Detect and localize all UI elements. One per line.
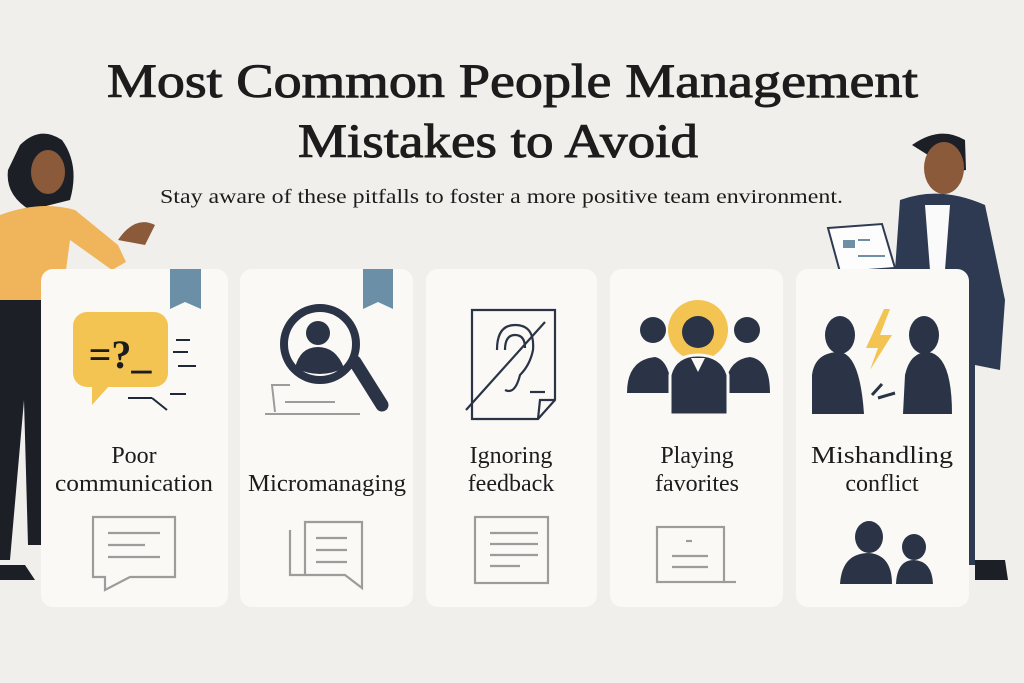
card 5: mishandling conflict [796,269,969,607]
card 2: micromanaging [240,269,413,607]
card 3: ignoring feedback: Ignoring [470,443,552,469]
icon: group with highlighted person [627,300,770,415]
figure: man [828,134,1008,580]
icon: chat [93,517,175,590]
card 4: playing favorites: favorites [655,471,739,497]
card 2: micromanaging: Micromanaging [248,471,406,497]
title: Mistakes to Avoid [298,115,698,168]
icon: two people with lightning [812,309,952,414]
subtitle: Stay aware of these pitfalls to foster a more positive team environment. [160,186,843,208]
card 1: poor communication: communication [55,471,213,497]
bookmark [170,269,201,309]
icon: crossed ear [466,310,555,419]
card 3: ignoring feedback [426,269,597,607]
card 1: poor communication [41,269,228,607]
card 4: playing favorites [610,269,783,607]
figure: woman [0,134,155,580]
card 5: mishandling conflict: conflict [845,471,919,497]
title: Most Common People Management [107,55,919,108]
icon: speech bubble question [73,312,196,410]
icon: magnifier person [265,308,382,414]
title [107,55,919,168]
card 1: poor communication: Poor [111,443,157,469]
icon: two silhouettes [840,521,933,584]
icon: speech bubble question: =?_ [89,332,152,377]
card 3: ignoring feedback: feedback [468,471,554,497]
card 4: playing favorites: Playing [660,443,734,469]
card 5: mishandling conflict: Mishandling [811,443,953,469]
